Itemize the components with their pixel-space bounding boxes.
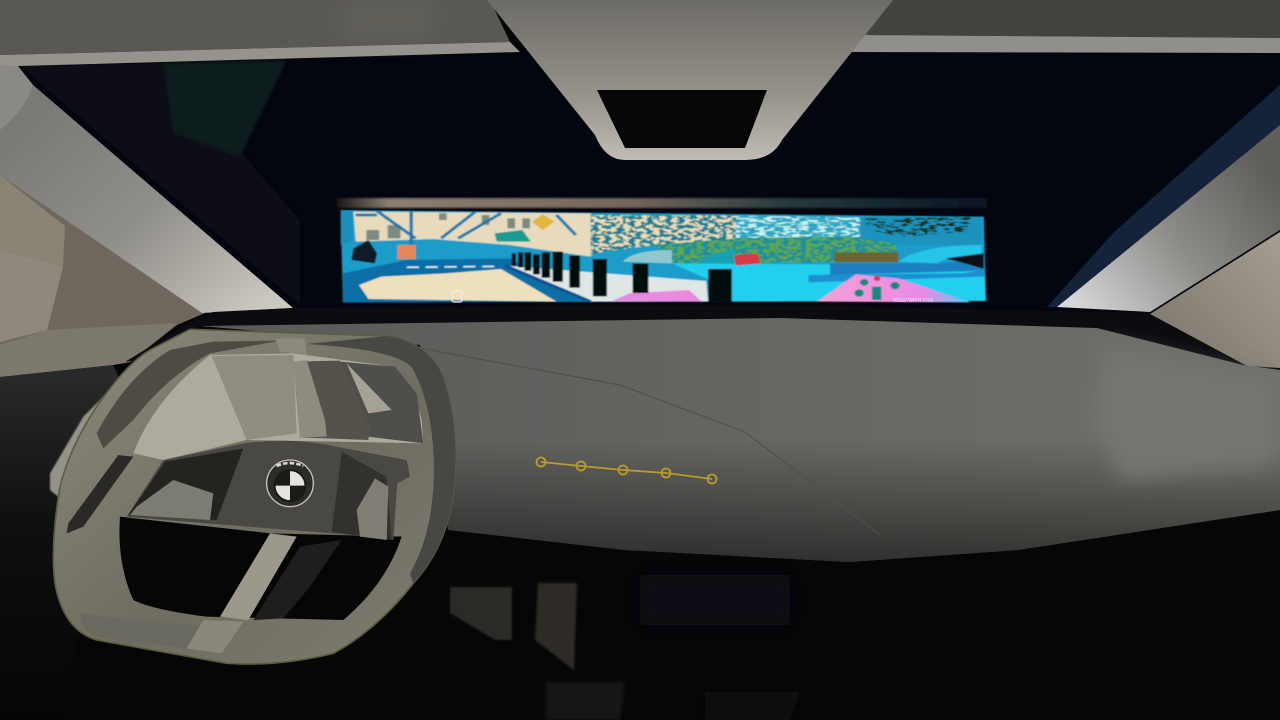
display: orange sign <box>398 245 415 259</box>
display: sand patch <box>359 269 557 302</box>
right chrome highlight <box>357 478 388 540</box>
display: figures <box>854 276 900 300</box>
dim triangle through wheel <box>212 355 297 440</box>
wheel rim <box>53 329 455 664</box>
display: right blue car <box>898 245 982 263</box>
wheel shadow backing <box>50 360 147 520</box>
BMW logo <box>267 460 313 507</box>
display: plaza steps <box>809 270 984 282</box>
display: lane dashes <box>407 264 501 270</box>
display: hedge speckle <box>655 237 898 263</box>
display: plaza <box>672 263 986 302</box>
top spoke <box>275 338 370 440</box>
display icon <box>452 291 462 302</box>
right A-pillar <box>1057 125 1280 312</box>
hub right chrome detail <box>332 452 392 540</box>
display: pedestrian silhouette <box>351 240 377 263</box>
pillar knob <box>0 65 33 130</box>
ceiling <box>0 0 1280 66</box>
hub <box>127 441 410 540</box>
dashboard black top edge <box>125 305 1247 366</box>
display: left road <box>343 258 595 302</box>
display reflection strip <box>337 198 987 208</box>
rim dark outer right <box>307 336 455 583</box>
mirror <box>597 90 767 148</box>
display: canopy light leaves <box>591 215 736 255</box>
dashboard light patch <box>1095 345 1275 480</box>
display: teal car <box>698 250 736 263</box>
display: windows <box>366 213 530 240</box>
display: teal left facade <box>341 210 354 245</box>
lower opening <box>119 517 402 620</box>
yellow five-point light line <box>536 458 716 484</box>
left door panel <box>0 172 205 377</box>
display: canopy base <box>591 215 736 255</box>
display: yellow road sign <box>532 214 554 230</box>
lower left door <box>0 365 130 720</box>
bottom spoke <box>187 533 342 653</box>
display: tree highlights <box>736 216 860 242</box>
rear-view mirror housing <box>487 0 893 160</box>
windshield <box>0 40 1280 320</box>
display: bridge <box>356 211 576 245</box>
rim dark upper left <box>97 341 280 448</box>
display: red car <box>734 253 761 266</box>
left chrome highlight <box>130 480 213 520</box>
upper opening <box>133 353 423 460</box>
display: sidewalk <box>505 266 708 302</box>
display: dark foliage <box>864 217 971 237</box>
display: pink crossing <box>817 274 971 302</box>
right door panel <box>1150 232 1280 368</box>
display caption: HOLD WITH YOU <box>893 298 934 304</box>
left rim slot <box>67 455 133 533</box>
dashboard surface <box>200 318 1280 562</box>
display: curb <box>505 266 591 302</box>
display: hedge <box>655 237 898 263</box>
dashboard shading <box>420 440 1280 562</box>
display: pink patch <box>612 290 702 302</box>
dashboard crease <box>420 348 880 535</box>
steering wheel <box>50 329 455 664</box>
display: green awning <box>495 230 531 242</box>
display: buildings <box>354 212 591 257</box>
display: black car <box>945 253 984 269</box>
display: upper right scene <box>860 217 982 245</box>
display: distant trees <box>736 216 860 242</box>
display: silver car <box>623 250 672 263</box>
left A-pillar <box>0 65 293 313</box>
hub left chrome detail <box>128 448 243 520</box>
display: stepped wall <box>830 262 984 275</box>
light triangle through wheel <box>347 363 392 413</box>
display: bollards <box>512 252 732 302</box>
panoramic display <box>341 210 986 302</box>
display: low wall <box>834 252 898 262</box>
lower rim shade <box>80 613 203 648</box>
footwell <box>450 575 800 720</box>
dash seen through wheel <box>340 362 423 443</box>
